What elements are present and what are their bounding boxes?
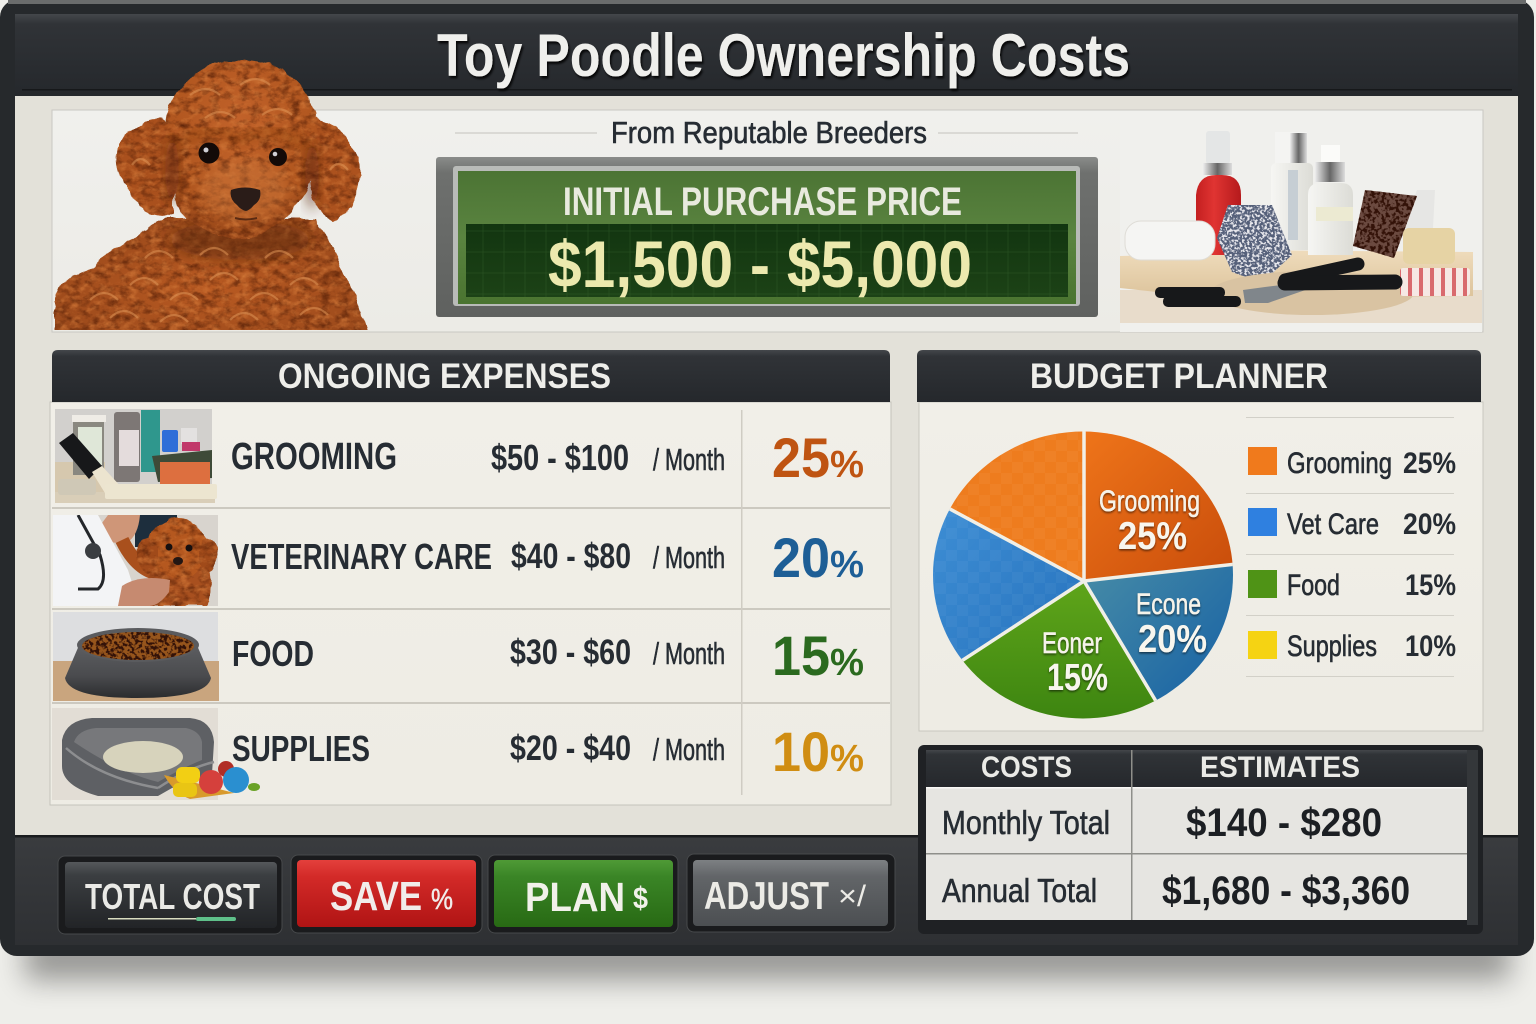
row: veterinary care bbox=[53, 515, 864, 606]
price display: INITIAL PURCHASE PRICE bbox=[563, 180, 962, 224]
pie label: econe: Econe bbox=[1136, 588, 1201, 621]
button: save: % bbox=[431, 884, 453, 916]
legend item: supplies bbox=[1248, 630, 1456, 663]
row: grooming: % bbox=[830, 444, 864, 486]
row: food: / Month bbox=[653, 636, 725, 671]
pie label: grooming: Grooming bbox=[1099, 485, 1200, 518]
image: vet with poodle bbox=[53, 515, 218, 606]
poodle head bbox=[166, 60, 316, 238]
button: plan bbox=[488, 855, 678, 933]
price display: $1,500 - $5,000 bbox=[548, 227, 972, 301]
poodle body bbox=[55, 218, 368, 335]
panel: initial purchase banner bbox=[52, 60, 1483, 335]
button: total cost bbox=[58, 856, 282, 934]
row: food: % bbox=[830, 642, 864, 684]
row: veterinary care: 20 bbox=[772, 526, 830, 589]
button: plan: PLAN bbox=[525, 874, 625, 920]
legend item: grooming: 25% bbox=[1403, 447, 1456, 480]
row: supplies bbox=[52, 708, 864, 800]
row: food bbox=[53, 612, 864, 701]
row: grooming: / Month bbox=[653, 442, 725, 477]
image: poodle puppy bbox=[55, 60, 368, 335]
poodle eyes and nose bbox=[198, 142, 287, 220]
row: supplies: 10 bbox=[772, 720, 830, 783]
row: monthly total: $140 - $280 bbox=[1186, 801, 1382, 845]
pie label: eoner: 15% bbox=[1047, 657, 1108, 699]
row: annual total: Annual Total bbox=[942, 872, 1097, 909]
legend item: food bbox=[1248, 569, 1456, 602]
panel: cost totals table bbox=[918, 745, 1483, 934]
header: budget planner bbox=[917, 350, 1481, 402]
price display bbox=[436, 157, 1098, 317]
row: veterinary care: % bbox=[830, 544, 864, 586]
row: grooming bbox=[55, 409, 864, 503]
legend item: supplies: 10% bbox=[1405, 630, 1456, 663]
image: grooming supplies bbox=[55, 409, 217, 503]
poodle right ear bbox=[310, 118, 360, 222]
row: veterinary care: / Month bbox=[653, 540, 725, 575]
row: monthly total bbox=[942, 801, 1382, 845]
legend bbox=[1246, 417, 1456, 677]
panel: budget planner bbox=[917, 350, 1483, 740]
table header bbox=[981, 751, 1360, 784]
button: adjust: ADJUST bbox=[704, 875, 829, 918]
row: supplies: $20 - $40 bbox=[510, 729, 631, 768]
poodle neck shadow bbox=[170, 220, 310, 260]
pie label: grooming bbox=[1099, 485, 1200, 558]
row: food: $30 - $60 bbox=[510, 633, 631, 672]
image: grooming products bbox=[1120, 131, 1482, 323]
legend item: grooming: Grooming bbox=[1287, 447, 1392, 480]
row: grooming: 25 bbox=[772, 426, 830, 489]
row: food: FOOD bbox=[232, 633, 314, 674]
title: Toy Poodle Ownership Costs bbox=[437, 22, 1130, 89]
image: food bowl bbox=[53, 612, 219, 701]
row: supplies: / Month bbox=[653, 732, 725, 767]
button: adjust: ×/ bbox=[838, 880, 867, 913]
subheading: from reputable breeders: From Reputable Breeders bbox=[611, 115, 927, 150]
header: budget planner: BUDGET PLANNER bbox=[1030, 357, 1328, 396]
row: annual total bbox=[942, 869, 1410, 913]
legend item: vet care bbox=[1248, 508, 1456, 541]
poodle fur curls bbox=[90, 79, 348, 322]
table header: ESTIMATES bbox=[1200, 751, 1360, 784]
row: veterinary care: $40 - $80 bbox=[511, 537, 631, 576]
legend item: vet care: 20% bbox=[1403, 508, 1456, 541]
header: ongoing expenses: ONGOING EXPENSES bbox=[278, 357, 611, 396]
row: veterinary care: VETERINARY CARE bbox=[231, 536, 492, 577]
button: plan: $ bbox=[633, 880, 648, 915]
pie label: eoner: Eoner bbox=[1042, 627, 1102, 660]
button: adjust bbox=[687, 854, 895, 932]
legend item: grooming bbox=[1248, 447, 1456, 480]
pie label: econe bbox=[1136, 588, 1207, 661]
row: annual total: $1,680 - $3,360 bbox=[1162, 869, 1410, 913]
pie label: grooming: 25% bbox=[1118, 515, 1187, 558]
button: save bbox=[291, 855, 482, 933]
row: grooming: $50 - $100 bbox=[491, 437, 629, 478]
row: food: 15 bbox=[772, 624, 830, 687]
title bar bbox=[15, 14, 1518, 96]
legend item: supplies: Supplies bbox=[1287, 630, 1377, 663]
button: save: SAVE bbox=[330, 873, 422, 919]
table header: COSTS bbox=[981, 751, 1072, 784]
button: total cost: TOTAL COST bbox=[85, 876, 260, 917]
row: monthly total: Monthly Total bbox=[942, 804, 1110, 841]
pie label: econe: 20% bbox=[1138, 618, 1207, 661]
image: pet bed and toys bbox=[52, 708, 260, 800]
header: ongoing expenses bbox=[52, 350, 890, 402]
legend item: food: 15% bbox=[1405, 569, 1456, 602]
pie chart bbox=[933, 432, 1233, 718]
poodle left ear bbox=[117, 118, 174, 215]
panel: ongoing expenses bbox=[50, 350, 891, 805]
row: grooming: GROOMING bbox=[231, 436, 397, 478]
poodle face shading bbox=[165, 131, 319, 220]
row: supplies: SUPPLIES bbox=[232, 728, 370, 769]
bottom control bar bbox=[15, 835, 1518, 945]
legend item: food: Food bbox=[1287, 569, 1340, 602]
pie label: eoner bbox=[1042, 627, 1108, 699]
row: supplies: % bbox=[830, 738, 864, 780]
frame drop shadow bbox=[25, 935, 1510, 980]
legend item: vet care: Vet Care bbox=[1287, 508, 1379, 541]
